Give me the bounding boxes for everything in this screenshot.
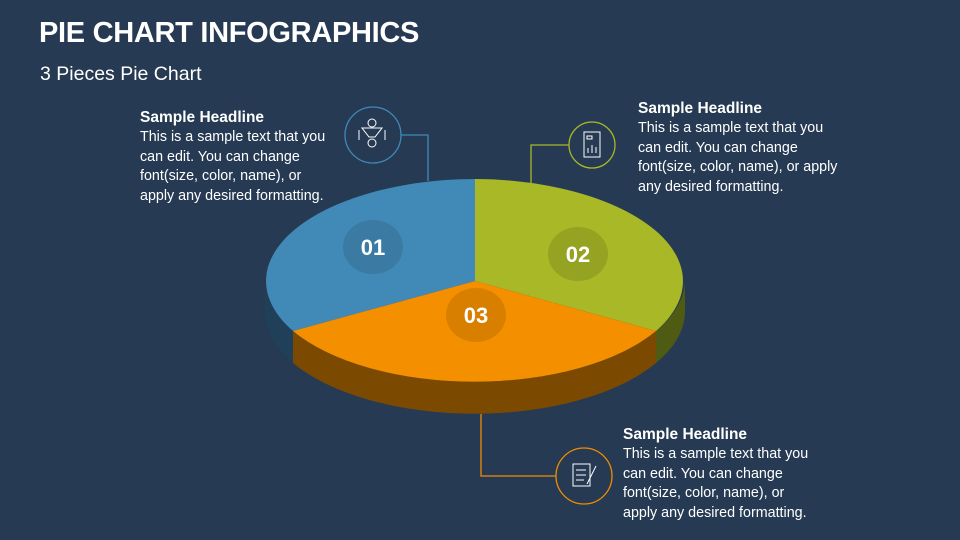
text block 1: This is a sample text that you [140, 129, 325, 145]
text block 3: This is a sample text that you [623, 446, 808, 462]
text block 3: can edit. You can change [623, 466, 783, 482]
text block 3: apply any desired formatting. [623, 504, 807, 520]
icon: funnel [345, 107, 401, 163]
text block 3: font(size, color, name), or [623, 485, 784, 501]
text block 2: font(size, color, name), or apply [638, 159, 837, 175]
slice 02: 02 [566, 242, 590, 267]
text block 2: any desired formatting. [638, 178, 783, 194]
slice 01 [266, 179, 475, 331]
slice 03 [293, 281, 656, 382]
text block 3: Sample Headline [623, 426, 747, 443]
text block 1: font(size, color, name), or [140, 168, 301, 184]
icon: document pen [556, 448, 612, 504]
slice 03: 03 [464, 303, 488, 328]
slice 02 [475, 179, 683, 331]
text block 3 [623, 426, 808, 520]
text block 1: Sample Headline [140, 109, 264, 126]
connectors [401, 135, 569, 476]
text block 2: This is a sample text that you [638, 120, 823, 136]
text block 1: apply any desired formatting. [140, 188, 324, 204]
pie sides [265, 281, 293, 363]
text block 2: Sample Headline [638, 100, 762, 117]
text block 2 [638, 100, 838, 194]
title: PIE CHART INFOGRAPHICS [39, 17, 419, 49]
icon: report [569, 122, 615, 168]
text block 2: can edit. You can change [638, 140, 798, 156]
text block 1 [140, 109, 325, 204]
slice 01: 01 [361, 235, 385, 260]
text block 1: can edit. You can change [140, 148, 300, 164]
subtitle: 3 Pieces Pie Chart [40, 63, 202, 85]
